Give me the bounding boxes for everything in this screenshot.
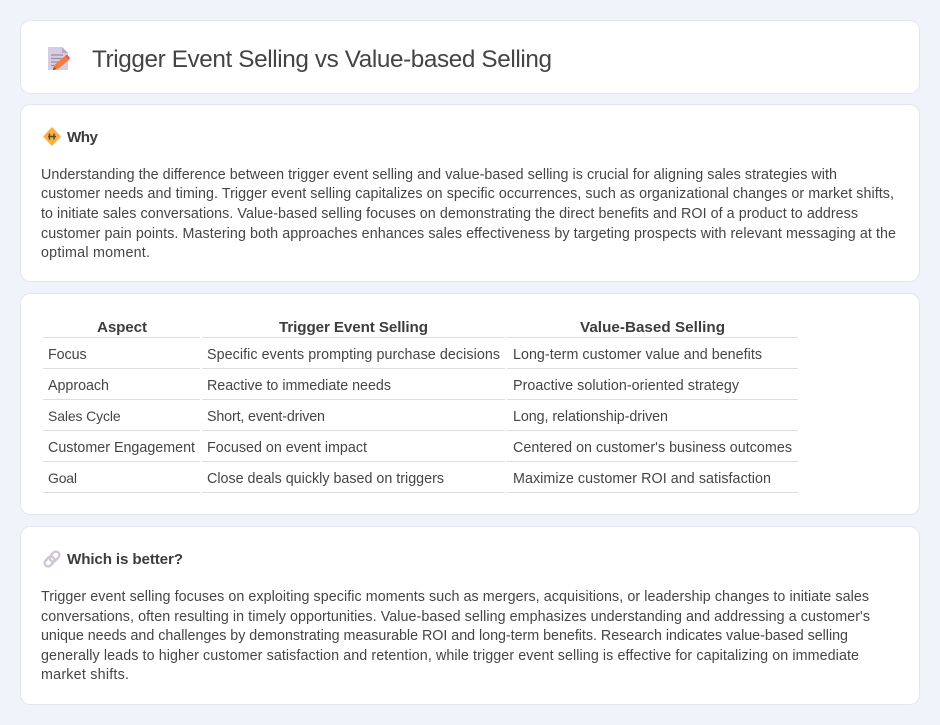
table row: focus bbox=[48, 347, 762, 363]
panel: which is better bbox=[20, 526, 920, 704]
heading: why: Why bbox=[67, 129, 99, 146]
text block: why paragraph bbox=[41, 167, 896, 261]
table row: sales cycle: Long, relationship-driven bbox=[513, 409, 668, 425]
table row: focus: Long-term customer value and benefits bbox=[513, 347, 762, 363]
table header: Aspect bbox=[97, 319, 147, 336]
panel: why bbox=[20, 104, 920, 282]
table row: approach: Proactive solution-oriented strategy bbox=[513, 378, 740, 394]
table row: goal: Goal bbox=[48, 470, 77, 486]
table row: focus: Specific events prompting purchase decisions bbox=[207, 347, 500, 363]
table row: focus: Focus bbox=[48, 347, 87, 363]
panel: header bbox=[20, 20, 920, 94]
table row: goal bbox=[48, 470, 771, 487]
table row: approach: Reactive to immediate needs bbox=[207, 378, 391, 394]
text block: why paragraph: to initiate sales conversations. Value-based selling focuses on demonstrating the direct benefits and ROI of a product to address bbox=[41, 206, 858, 222]
icon: link bbox=[43, 550, 61, 568]
table row: sales cycle: Short, event-driven bbox=[207, 409, 325, 425]
text block: why paragraph: customer needs and timing. Trigger event selling capitalizes on specific occurrences, such as organizational changes or market shifts, bbox=[41, 186, 894, 202]
text block: why paragraph: optimal moment. bbox=[41, 245, 150, 261]
heading: which is better: Which is better? bbox=[67, 551, 183, 568]
title: Trigger Event Selling vs Value-based Selling bbox=[92, 46, 552, 73]
text block: which is better paragraph: Trigger event selling focuses on exploiting specific moments such as mergers, acquisitions, or leadership changes to initiate sales bbox=[41, 589, 869, 605]
table header: Trigger Event Selling bbox=[279, 319, 428, 336]
text block: which is better paragraph: generally leads to higher customer satisfaction and retention, while trigger event selling is effective for capitalizing on immediate bbox=[41, 648, 859, 664]
table row: goal: Maximize customer ROI and satisfaction bbox=[513, 471, 771, 487]
table row: sales cycle: Sales Cycle bbox=[48, 408, 121, 424]
text block: which is better paragraph: market shifts. bbox=[41, 667, 129, 683]
icon: memo with pencil bbox=[48, 47, 70, 70]
text block: why paragraph: customer pain points. Mastering both approaches enhances sales effectiveness by targeting prospects with relevant messaging at the bbox=[41, 226, 896, 242]
table row: customer engagement: Centered on customer's business outcomes bbox=[513, 440, 792, 456]
table row: goal: Close deals quickly based on triggers bbox=[207, 471, 444, 487]
table header: Value-Based Selling bbox=[580, 319, 725, 336]
text block: which is better paragraph: conversations, often resulting in timely opportunities. Value-based selling emphasizes understanding and addressing a customer's bbox=[41, 609, 870, 625]
table row: customer engagement: Customer Engagement bbox=[48, 440, 195, 456]
table row: customer engagement: Focused on event impact bbox=[207, 440, 367, 456]
text block: why paragraph: Understanding the difference between trigger event selling and value-based selling is crucial for aligning sales strategies with bbox=[41, 167, 837, 183]
icon: warning diamond bbox=[44, 128, 60, 145]
table row: approach: Approach bbox=[48, 378, 109, 394]
text block: which is better paragraph bbox=[41, 589, 870, 683]
table row: sales cycle bbox=[48, 408, 668, 425]
table row: approach bbox=[48, 378, 740, 394]
table row: customer engagement bbox=[48, 440, 792, 456]
table header bbox=[97, 319, 725, 336]
panel: comparison table bbox=[20, 294, 920, 514]
text block: which is better paragraph: unique needs and challenges by demonstrating measurable ROI and long-term benefits. Research indicates value-based selling bbox=[41, 628, 848, 644]
